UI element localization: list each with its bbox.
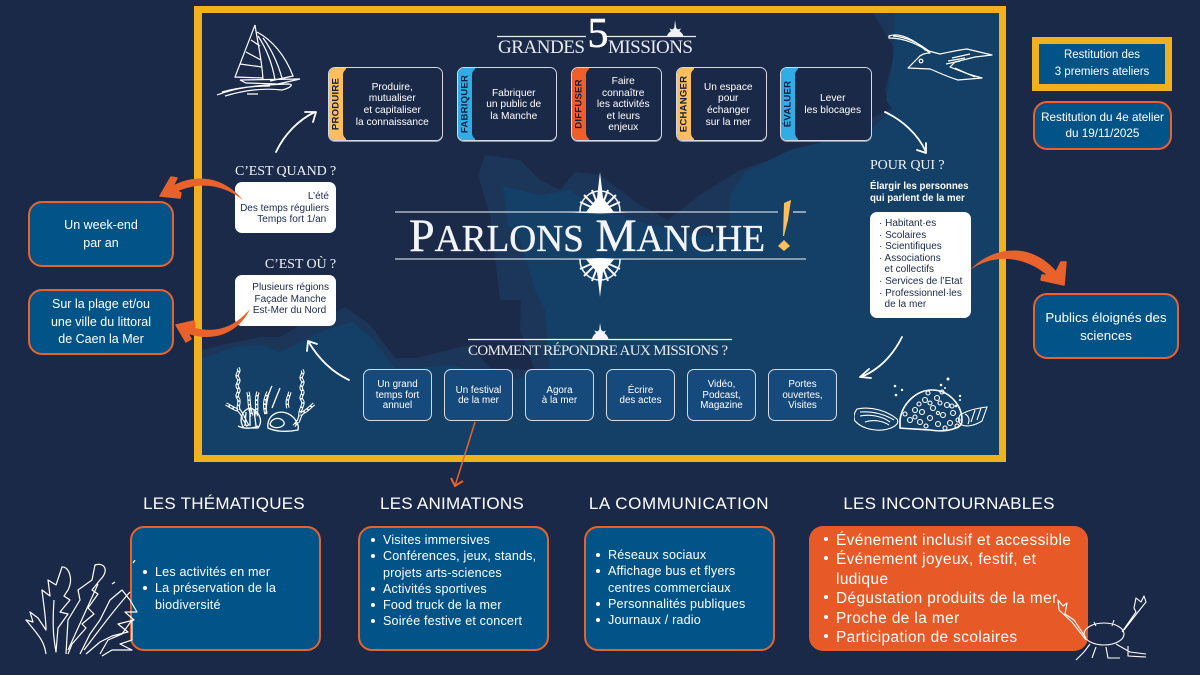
text box: pour qui: de la mer — [885, 299, 926, 310]
card: les animations: Activités sportives — [383, 582, 487, 596]
card: diffuser — [571, 67, 662, 141]
box: restitution 3 ateliers: Restitution des — [1064, 49, 1140, 61]
card: la communication: Affichage bus et flyers — [608, 564, 735, 578]
action: agora: Agora — [546, 385, 573, 396]
text box: pour qui: · Scolaires — [879, 230, 926, 241]
card: echanger: sur la mer — [706, 117, 751, 128]
arrow: to lieu box — [175, 309, 250, 343]
icon: crab — [1058, 595, 1146, 660]
card: fabriquer: un public de — [486, 99, 541, 110]
box: restitution 3 ateliers: 3 premiers ateliers — [1055, 66, 1149, 78]
card: les thématiques: Les activités en mer — [155, 565, 270, 579]
box: week-end: Un week-end — [64, 218, 138, 232]
card: diffuser: enjeux — [608, 122, 638, 133]
card: les incontournables: Événement joyeux, festif, et — [836, 551, 1036, 568]
icon: algae and shells — [225, 367, 315, 432]
card: diffuser: les activités — [597, 99, 650, 110]
box: lieu — [28, 289, 174, 355]
box: restitution 4e atelier: Restitution du 4e atelier — [1041, 110, 1164, 124]
text box: c'est où: Façade Manche — [254, 294, 326, 305]
arrow: festival to animations — [450, 422, 476, 488]
heading: c'est quand: C’EST QUAND ? — [235, 164, 336, 179]
card: les thématiques: biodiversité — [155, 598, 221, 612]
box: restitution 4e atelier — [1033, 101, 1172, 150]
card: les incontournables: Participation de scolaires — [836, 629, 1018, 646]
card: les animations — [358, 526, 549, 651]
heading: les thématiques: LES THÉMATIQUES — [143, 494, 305, 513]
card: diffuser: et leurs — [607, 111, 640, 122]
text box: pour qui: · Professionnel·les — [879, 288, 962, 299]
card: les incontournables: Proche de la mer — [836, 610, 960, 627]
heading: comment répondre: COMMENT RÉPONDRE AUX MISSIONS ? — [468, 342, 728, 359]
card: fabriquer — [457, 67, 557, 141]
text box: c'est quand: Des temps réguliers — [240, 203, 329, 214]
card: les thématiques: La préservation de la — [155, 581, 276, 595]
card: les animations: Visites immersives — [383, 533, 490, 547]
text box: pour qui — [870, 212, 971, 318]
sea halo — [202, 13, 999, 455]
heading: c'est où: C’EST OÙ ? — [265, 257, 336, 272]
card: les incontournables: Événement inclusif et accessible — [836, 532, 1071, 549]
action: écrire: Écrire — [628, 385, 653, 396]
text box: pour qui: · Services de l’Etat — [879, 276, 962, 287]
card: echanger: pour — [718, 93, 738, 104]
card: echanger: échanger — [707, 105, 749, 116]
card: produire: et capitaliser — [364, 105, 421, 116]
card: fabriquer: FABRIQUER — [460, 75, 470, 133]
card: diffuser: connaître — [602, 88, 644, 99]
subheading: élargir — [870, 180, 969, 204]
card: diffuser: DIFFUSER — [574, 79, 584, 129]
card: fabriquer: la Manche — [490, 111, 537, 122]
card: la communication: centres commerciaux — [608, 581, 731, 595]
action: grand temps fort — [363, 369, 432, 421]
action: vidéo: Vidéo, — [708, 379, 735, 390]
action: grand temps fort: Un grand — [377, 379, 418, 390]
text box: c'est où — [235, 275, 336, 326]
subheading: élargir: Élargir les personnes — [870, 181, 969, 192]
action: écrire — [606, 369, 675, 421]
card: les animations: Soirée festive et concert — [383, 614, 522, 628]
card: evaluer — [780, 67, 872, 141]
heading: la communication: LA COMMUNICATION — [589, 494, 769, 513]
card: les incontournables — [809, 526, 1088, 651]
card: les animations: projets arts-sciences — [383, 566, 502, 580]
sea — [202, 13, 999, 455]
card: la communication: Réseaux sociaux — [608, 548, 706, 562]
text box: pour qui: et collectifs — [885, 264, 934, 275]
icon: sailboat — [216, 24, 300, 97]
heading: 5 grandes missions: 5 — [588, 11, 608, 57]
card: echanger: Un espace — [704, 82, 753, 93]
card: echanger: ECHANGER — [678, 76, 690, 132]
heading: les incontournables: LES INCONTOURNABLES — [843, 494, 1055, 513]
action: portes ouvertes: ouvertes, — [782, 390, 823, 401]
card: diffuser: Faire — [612, 76, 635, 87]
card: produire: mutualiser — [369, 93, 416, 104]
box: publics éloignés — [1033, 293, 1179, 359]
icon: shells and coral — [854, 378, 988, 432]
heading: les animations: LES ANIMATIONS — [380, 494, 524, 513]
card: produire: la connaissance — [356, 117, 429, 128]
card: les thématiques — [130, 526, 321, 651]
action: grand temps fort: annuel — [383, 400, 412, 411]
text box: c'est où: Est-Mer du Nord — [253, 305, 326, 316]
action: agora: à la mer — [542, 395, 577, 406]
text box: c'est où: Plusieurs régions — [252, 282, 329, 293]
card: les animations: Food truck de la mer — [383, 598, 502, 612]
card: produire: PRODUIRE — [330, 78, 342, 130]
icon: seagull — [888, 34, 993, 81]
text box: pour qui: · Scientifiques — [879, 241, 942, 252]
action: portes ouvertes — [768, 369, 837, 421]
card: les animations: Conférences, jeux, stands, — [383, 549, 536, 563]
box: publics éloignés: Publics éloignés des — [1045, 310, 1167, 324]
subheading: élargir: qui parlent de la mer — [870, 192, 965, 204]
action: agora — [525, 369, 594, 421]
text box: c'est quand — [235, 182, 336, 233]
heading: 5 grandes missions: GRANDES — [498, 37, 585, 58]
card: echanger — [676, 67, 767, 141]
action: festival: Un festival — [456, 385, 501, 396]
card: evaluer: Lever — [820, 93, 845, 104]
text box: pour qui: · Associations — [879, 253, 941, 264]
card: produire: Produire, — [372, 82, 413, 93]
card: fabriquer: Fabriquer — [492, 88, 536, 99]
arrow: to publics box — [970, 250, 1067, 286]
text box: c'est quand: Temps fort 1/an — [257, 214, 326, 225]
text box: pour qui: · Habitant·es — [879, 218, 936, 229]
action: vidéo: Podcast, — [702, 390, 741, 401]
card: evaluer: ÉVALUER — [782, 81, 794, 127]
card: les incontournables: Dégustation produits de la mer — [836, 590, 1058, 607]
text box: c'est quand: L’été — [308, 191, 329, 202]
heading: 5 grandes missions: MISSIONS — [608, 37, 693, 58]
box: lieu: Sur la plage et/ou — [52, 297, 150, 311]
heading: comment répondre — [468, 323, 732, 359]
icon: seaweed — [25, 560, 138, 656]
action: grand temps fort: temps fort — [376, 390, 419, 401]
action: portes ouvertes: Portes — [788, 379, 817, 390]
title: parlons manche — [395, 172, 806, 297]
action: festival — [444, 369, 513, 421]
card: produire — [328, 67, 443, 141]
box: publics éloignés: sciences — [1080, 328, 1132, 342]
arrow: to week-end box — [159, 176, 243, 200]
action: vidéo: Magazine — [700, 400, 743, 411]
card: la communication: Personnalités publiques — [608, 597, 745, 611]
box: restitution 3 ateliers — [1032, 37, 1172, 91]
action: portes ouvertes: Visites — [788, 400, 817, 411]
box: week-end: par an — [83, 236, 119, 250]
box: lieu: une ville du littoral — [51, 315, 151, 329]
action: vidéo — [687, 369, 756, 421]
heading: 5 grandes missions — [497, 11, 696, 58]
title: parlons manche: PARLONS MANCHE — [409, 210, 765, 262]
heading: pour qui: POUR QUI ? — [870, 158, 944, 173]
card: la communication: Journaux / radio — [608, 613, 701, 627]
card: evaluer: les blocages — [804, 105, 861, 116]
card: les incontournables: ludique — [836, 571, 888, 588]
action: festival: de la mer — [458, 395, 499, 406]
card: la communication — [584, 526, 775, 651]
box: restitution 4e atelier: du 19/11/2025 — [1066, 127, 1139, 140]
arrow: white arrows cycle — [275, 111, 927, 381]
box: week-end — [28, 201, 174, 267]
action: écrire: des actes — [620, 395, 661, 406]
box: lieu: de Caen la Mer — [58, 332, 144, 346]
